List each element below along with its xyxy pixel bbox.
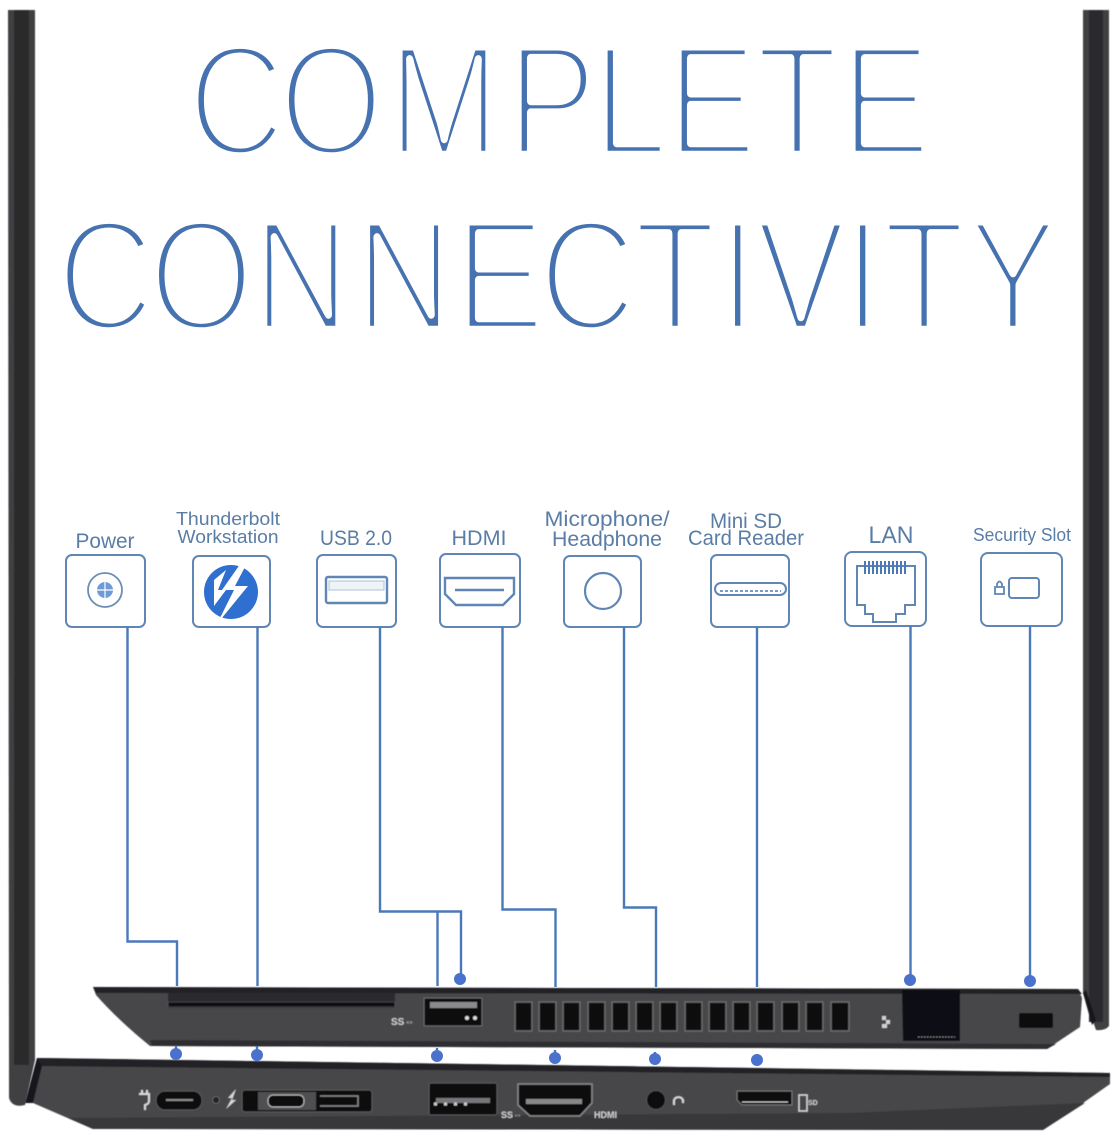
panel: Mini SD Card Reader: Card Reader xyxy=(688,527,804,550)
USB port, lower xyxy=(429,1083,497,1115)
icon: audio jack xyxy=(585,573,621,609)
laptop body: upper view xyxy=(93,987,1082,1049)
panel: Mini SD Card Reader: Mini SD xyxy=(710,510,782,533)
micro SD slot, lower xyxy=(737,1091,818,1111)
connector lines and dots xyxy=(128,626,1036,1066)
HDMI port, lower xyxy=(501,1084,617,1120)
title: COMPLETE xyxy=(188,13,931,189)
LAN port, upper xyxy=(882,990,960,1041)
USB-C power port xyxy=(139,1090,202,1110)
panel: Microphone/Headphone xyxy=(544,508,670,627)
icon: power connector xyxy=(88,573,122,607)
cooling vents xyxy=(515,1002,849,1031)
panel: Thunderbolt Workstation xyxy=(176,508,280,627)
USB port, upper: SS⇔ xyxy=(391,1017,414,1028)
icon: lock slot xyxy=(995,578,1039,598)
panel: Microphone/Headphone: Headphone xyxy=(552,528,662,551)
panel: Mini SD Card Reader xyxy=(688,510,804,627)
laptop lid: left edge xyxy=(8,10,35,1106)
panel: Thunderbolt Workstation: Thunderbolt xyxy=(176,508,280,529)
panel: HDMI xyxy=(440,527,520,627)
HDMI port, lower: HDMI xyxy=(594,1110,617,1120)
icon: thunderbolt xyxy=(204,560,258,624)
micro SD slot, lower: SD xyxy=(808,1100,818,1107)
card slot xyxy=(168,993,395,1008)
panel: Power: Power xyxy=(76,530,134,553)
icon: LAN port xyxy=(857,561,915,622)
laptop lid: right edge xyxy=(1083,10,1109,1030)
audio jack, lower xyxy=(646,1090,683,1110)
laptop body: lower view xyxy=(25,1058,1110,1130)
panel: Security Slot: Security Slot xyxy=(973,525,1071,545)
panel: USB 2.0 xyxy=(317,527,396,627)
icon: HDMI port xyxy=(445,578,514,605)
panel: LAN: LAN xyxy=(868,522,914,549)
panel: Microphone/Headphone: Microphone/ xyxy=(544,508,670,531)
panel: USB 2.0: USB 2.0 xyxy=(320,527,392,550)
title: CONNECTIVITY xyxy=(57,188,1058,364)
panel: Power xyxy=(66,530,145,627)
panel: HDMI: HDMI xyxy=(452,527,506,550)
USB port, upper xyxy=(391,998,482,1028)
icon: SD slot xyxy=(715,583,786,595)
panel: LAN xyxy=(845,522,926,626)
icon: USB port xyxy=(326,577,387,603)
security slot, upper xyxy=(1019,1013,1053,1028)
title xyxy=(57,13,1058,364)
panel: Thunderbolt Workstation: Workstation xyxy=(178,526,278,547)
panel: Security Slot xyxy=(973,525,1071,626)
Thunderbolt dock port xyxy=(212,1089,372,1112)
HDMI port, lower: SS⇔ xyxy=(501,1110,522,1120)
